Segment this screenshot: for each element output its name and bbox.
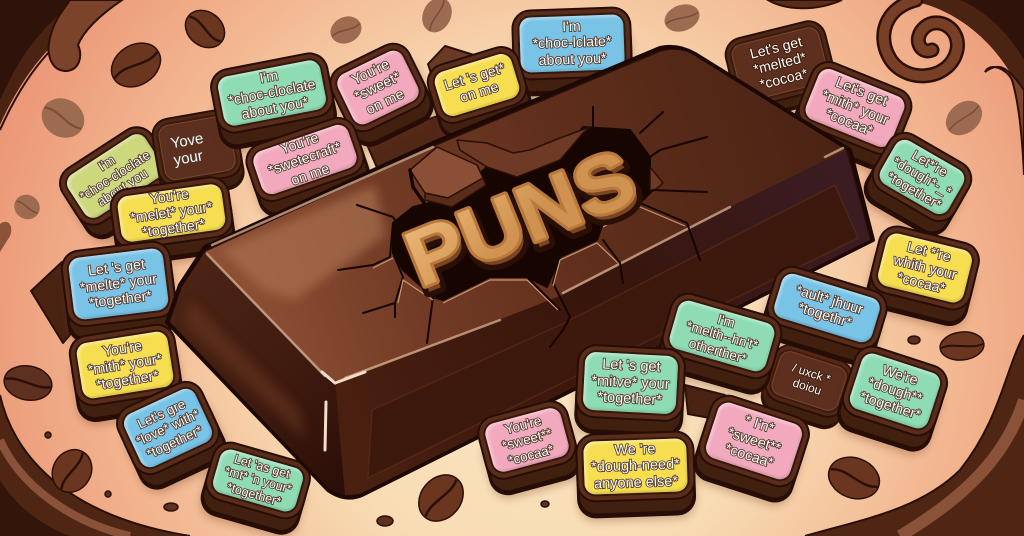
title word PUNS: PUNS <box>393 132 647 304</box>
swirl: top left <box>0 0 122 130</box>
candy: dark Yove: your <box>172 147 204 169</box>
candy: dark melted: Let's get <box>748 34 804 62</box>
candy: pink I'n: *sweet** <box>726 425 783 457</box>
candy: blue love: *love* with* <box>134 407 202 449</box>
candy: pink sweet: You're <box>349 56 392 88</box>
candy: pink I'n <box>703 400 805 482</box>
candy: dark melted: *cocoa* <box>758 66 810 93</box>
candy: green dough: *dough*-_* <box>890 154 954 200</box>
candy: green dough: Let*'re <box>909 147 950 180</box>
candy: pink swetecraft <box>250 122 360 197</box>
candy: pink sweet low: *sweet** <box>500 426 554 454</box>
candy: dark tile: doiou <box>791 376 823 398</box>
bar body <box>167 47 873 498</box>
candy: pink swetecraft: *swetecraft* <box>267 140 343 179</box>
left sheen <box>185 300 305 440</box>
candy: blue love: Let's gre <box>135 396 188 432</box>
candy: green mitve: *together* <box>597 390 662 409</box>
swirl: top right with spiral <box>768 0 1024 175</box>
candy: blue choc: *choc-lclate* <box>532 34 612 53</box>
candy: green melth: I'm <box>716 311 737 331</box>
candy: blue melte: *together* <box>88 288 153 312</box>
candy: yellow whith: Let *'re <box>905 239 952 265</box>
candy: green melth <box>667 298 777 374</box>
hole <box>393 127 650 300</box>
top face <box>205 50 846 381</box>
candy: yellow melet <box>116 183 227 243</box>
front panel shine <box>368 185 858 478</box>
candy: pink swetecraft: on me <box>289 161 331 189</box>
shards <box>410 127 663 207</box>
candy: green dough right <box>847 351 943 431</box>
candy: lime: about you <box>95 166 151 210</box>
candy: yellow on me <box>432 51 522 119</box>
candy: pink mith: *cocaa* <box>823 106 875 140</box>
candy: blue love <box>120 385 216 471</box>
crack highlights <box>373 207 685 310</box>
candy: green dough right: *dough** <box>866 375 924 407</box>
candy: pink mith <box>802 66 908 150</box>
candy: yellow on me: on me <box>458 79 501 106</box>
candy: green dough: *together* <box>885 169 944 212</box>
candy: yellow whith: *cocaa* <box>895 270 947 297</box>
candy: pink mith: Let's get <box>833 75 889 110</box>
candy: yellow mith: You're <box>102 338 143 360</box>
cracks <box>338 107 707 347</box>
candy: blue together: *ault* jhuur <box>794 282 865 318</box>
silhouette <box>167 47 873 498</box>
swirl: bottom right <box>805 335 1024 536</box>
candy: pink sweet <box>334 47 422 128</box>
candy: yellow need: anyone else* <box>594 473 678 492</box>
candy: green dough <box>876 136 968 218</box>
candy: dark tile <box>769 348 849 414</box>
candy: dark tile: / uxck * <box>790 361 832 386</box>
candy: green choc <box>216 59 328 127</box>
candy: pink sweet low <box>483 406 571 474</box>
candy: green low left: Let 'as get <box>232 452 291 481</box>
candy: yellow melet: *melet* your* <box>129 199 214 227</box>
candy: blue melte: *melte* your <box>79 271 158 297</box>
candy: pink I'n: * I'n* <box>742 413 776 437</box>
candy: green choc: I'm <box>258 67 279 87</box>
candy: green choc: *choc-cloclate <box>227 77 317 109</box>
candy: lime: I'm <box>95 152 118 174</box>
candy: green mitve: *mitve* your <box>591 373 670 393</box>
candy: yellow mith: *together* <box>95 368 160 394</box>
candy: pink sweet low: You're <box>503 413 543 437</box>
swirl: bottom left <box>0 395 190 536</box>
candy: pink I'n: *cocaa* <box>723 441 775 472</box>
candy: green mitve: Let 's get <box>602 357 661 376</box>
candy: green mitve <box>583 352 678 414</box>
candy: green dough right: We're <box>880 362 920 389</box>
candy: blue choc: I'm <box>562 19 581 36</box>
faded coffee beans <box>10 0 989 224</box>
title word PUNS: PUNS <box>397 138 651 310</box>
candy: yellow melet: You're <box>149 186 190 208</box>
candy: yellow mith <box>75 330 175 400</box>
candy: dark Yove <box>157 114 237 182</box>
candy: yellow whith: whith your <box>892 252 958 283</box>
candy: lime: *choc-cloclate <box>76 147 153 204</box>
candy: dark melted <box>729 25 831 103</box>
candy: pink sweet low: *cocaa* <box>507 441 555 468</box>
candy: blue melte: Let 's get <box>87 256 146 279</box>
candy: lime <box>63 130 167 222</box>
candy: green low left: *together* <box>225 480 283 508</box>
candy: pink swetecraft: You're <box>279 130 321 158</box>
left edge drip <box>0 222 11 252</box>
front face <box>335 150 870 495</box>
candy: yellow melet: *together* <box>141 217 206 241</box>
candy: yellow on me: Let 's get* <box>442 60 507 94</box>
candy: green dough right: *together* <box>858 389 923 424</box>
candy: blue together <box>772 271 882 345</box>
candy: pink sweet: on me <box>363 86 407 118</box>
candy: dark Yove: Yove <box>169 130 205 152</box>
candy: blue together: *togethr* <box>796 300 853 331</box>
candy: yellow mith: *mith* your* <box>87 351 163 379</box>
candy: blue choc: about you* <box>538 50 607 69</box>
top sheen <box>222 185 385 300</box>
candy: yellow need <box>583 438 688 495</box>
candy: green melth: otherther* <box>687 335 748 366</box>
candy: yellow whith <box>876 231 974 305</box>
candy: dark melted: *melted* <box>752 50 808 78</box>
candy: green low left <box>210 447 306 514</box>
candy: blue melte <box>68 247 169 321</box>
candy: pink mith: *mith* your <box>819 87 891 128</box>
candy: yellow need: We 're <box>614 441 656 458</box>
edge highlights <box>207 147 843 378</box>
broken chocolate chunks <box>31 46 725 418</box>
candy: green melth: *melth--hn't* <box>684 318 760 353</box>
left face <box>170 252 345 495</box>
candy: blue choc <box>519 14 625 73</box>
candy: green choc: about you* <box>240 94 310 123</box>
candy: green low left: *mt* 'n your* <box>223 464 293 497</box>
candy: yellow need: *dough-need* <box>591 457 680 476</box>
candy: blue love: *together* <box>144 422 205 461</box>
candy: pink sweet: *sweet* <box>352 69 403 105</box>
